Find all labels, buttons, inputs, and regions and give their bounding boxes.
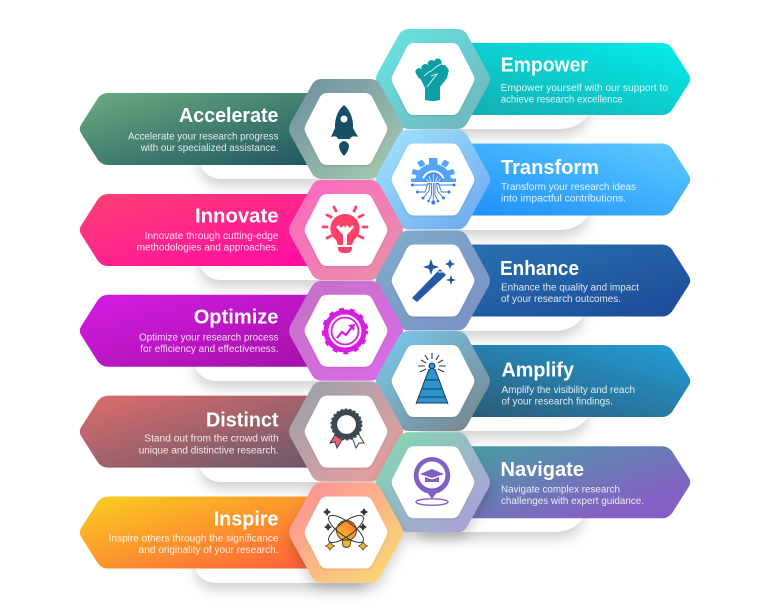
hexagon: Accelerate [289,79,403,179]
icon: gear circuit [411,158,456,204]
hexagon: Empower [376,29,490,129]
panel: Distinct [80,382,403,482]
panel: Inspire [80,482,403,583]
text: Empower description [501,83,668,105]
text: Enhance description [501,283,639,305]
text: Transform description: Transform your research ideas [501,182,636,193]
title: Optimize: Optimize [194,305,278,328]
icon: light bulb [323,207,367,253]
text: Empower description: Empower yourself with our support to [501,83,668,94]
panel: Transform [376,130,690,230]
banner: Distinct [80,396,325,468]
banner: Accelerate [80,93,325,165]
banner: Innovate [80,194,325,266]
hexagon: Distinct [289,382,403,482]
banner: Optimize [80,295,325,367]
text: Enhance description: Enhance the quality and impact [501,283,639,294]
text: Inspire description [109,534,279,556]
text: Accelerate description [128,132,278,154]
text: Optimize description [139,333,278,355]
banner: Navigate [445,446,690,518]
title: Navigate: Navigate [500,458,584,481]
shadow tab: Empower [420,100,588,129]
text: Inspire description: and originality of your research. [139,545,278,556]
text: Innovate description [137,231,279,253]
title: Accelerate: Accelerate [179,104,278,127]
text: Amplify description: Amplify the visibility and reach [502,385,635,396]
text: Accelerate description: with our specialized assistance. [140,143,278,154]
text: Distinct description: unique and distinctive research. [139,445,279,456]
icon: graduation location pin [414,457,450,505]
text: Transform description: into impactful contributions. [501,193,626,204]
text: Optimize description: for efficiency and effectiveness. [140,344,278,355]
hexagon: Innovate [289,180,403,280]
hexagon: Optimize [289,281,403,381]
text: Amplify description [502,385,635,407]
title: Enhance: Enhance [500,257,579,280]
shadow tab: Innovate [200,250,380,280]
shadow tab: Inspire [195,552,365,583]
shadow tab: Optimize [195,350,380,381]
panel: Accelerate [80,79,403,179]
banner: Amplify [445,345,690,417]
text: Optimize description: Optimize your research process [139,333,278,344]
text: Navigate description [501,485,644,507]
hexagon: Enhance [376,230,490,330]
panel: Enhance [376,230,690,331]
icon: atom bulb [323,508,368,550]
title: Empower: Empower [501,54,588,77]
text: Accelerate description: Accelerate your research progress [128,132,278,142]
shadow tab: Transform [420,200,588,230]
icon: magic wand [412,259,456,302]
panel: Navigate [376,432,690,532]
icon: rocket [331,105,358,156]
text: Navigate description: challenges with expert guidance. [501,496,644,507]
shadow tab: Distinct [200,452,380,482]
shadow tab: Navigate [420,503,583,532]
icon: award ribbon [330,410,364,448]
hexagon: Transform [376,130,490,230]
banner: Enhance [445,244,690,316]
text: Innovate description: methodologies and approaches. [137,242,278,253]
text: Distinct description: Stand out from the crowd with [144,434,279,445]
panel: Empower [376,29,690,129]
hexagon: Navigate [376,432,490,532]
text: Transform description [501,182,636,204]
text: Innovate description: Innovate through cutting-edge [145,231,279,242]
banner: Empower [445,43,690,115]
panel: Amplify [376,331,690,431]
title: Inspire: Inspire [214,508,278,531]
title: Innovate: Innovate [195,205,278,228]
icon: signal tower [416,353,448,404]
title: Distinct: Distinct [206,409,279,432]
hexagon: Amplify [376,331,490,431]
text: Distinct description [139,434,279,456]
shadow tab: Enhance [420,300,583,331]
text: Navigate description: Navigate complex research [501,485,620,496]
panel: Optimize [80,281,403,381]
shadow tab: Amplify [420,402,588,431]
title: Transform: Transform [501,156,599,179]
panel: Innovate [80,180,403,280]
text: Enhance description: of your research outcomes. [501,294,621,305]
icon: gear with chart arrow [324,310,366,352]
text: Inspire description: Inspire others through the significance [109,534,279,545]
shadow tab: Accelerate [200,150,380,179]
icon: raised fist [414,58,449,101]
title: Amplify: Amplify [502,359,575,382]
banner: Inspire [80,496,325,568]
banner: Transform [445,144,690,216]
text: Empower description: achieve research excellence [501,94,623,105]
text: Amplify description: of your research findings. [502,396,613,407]
hexagon: Inspire [289,482,403,582]
